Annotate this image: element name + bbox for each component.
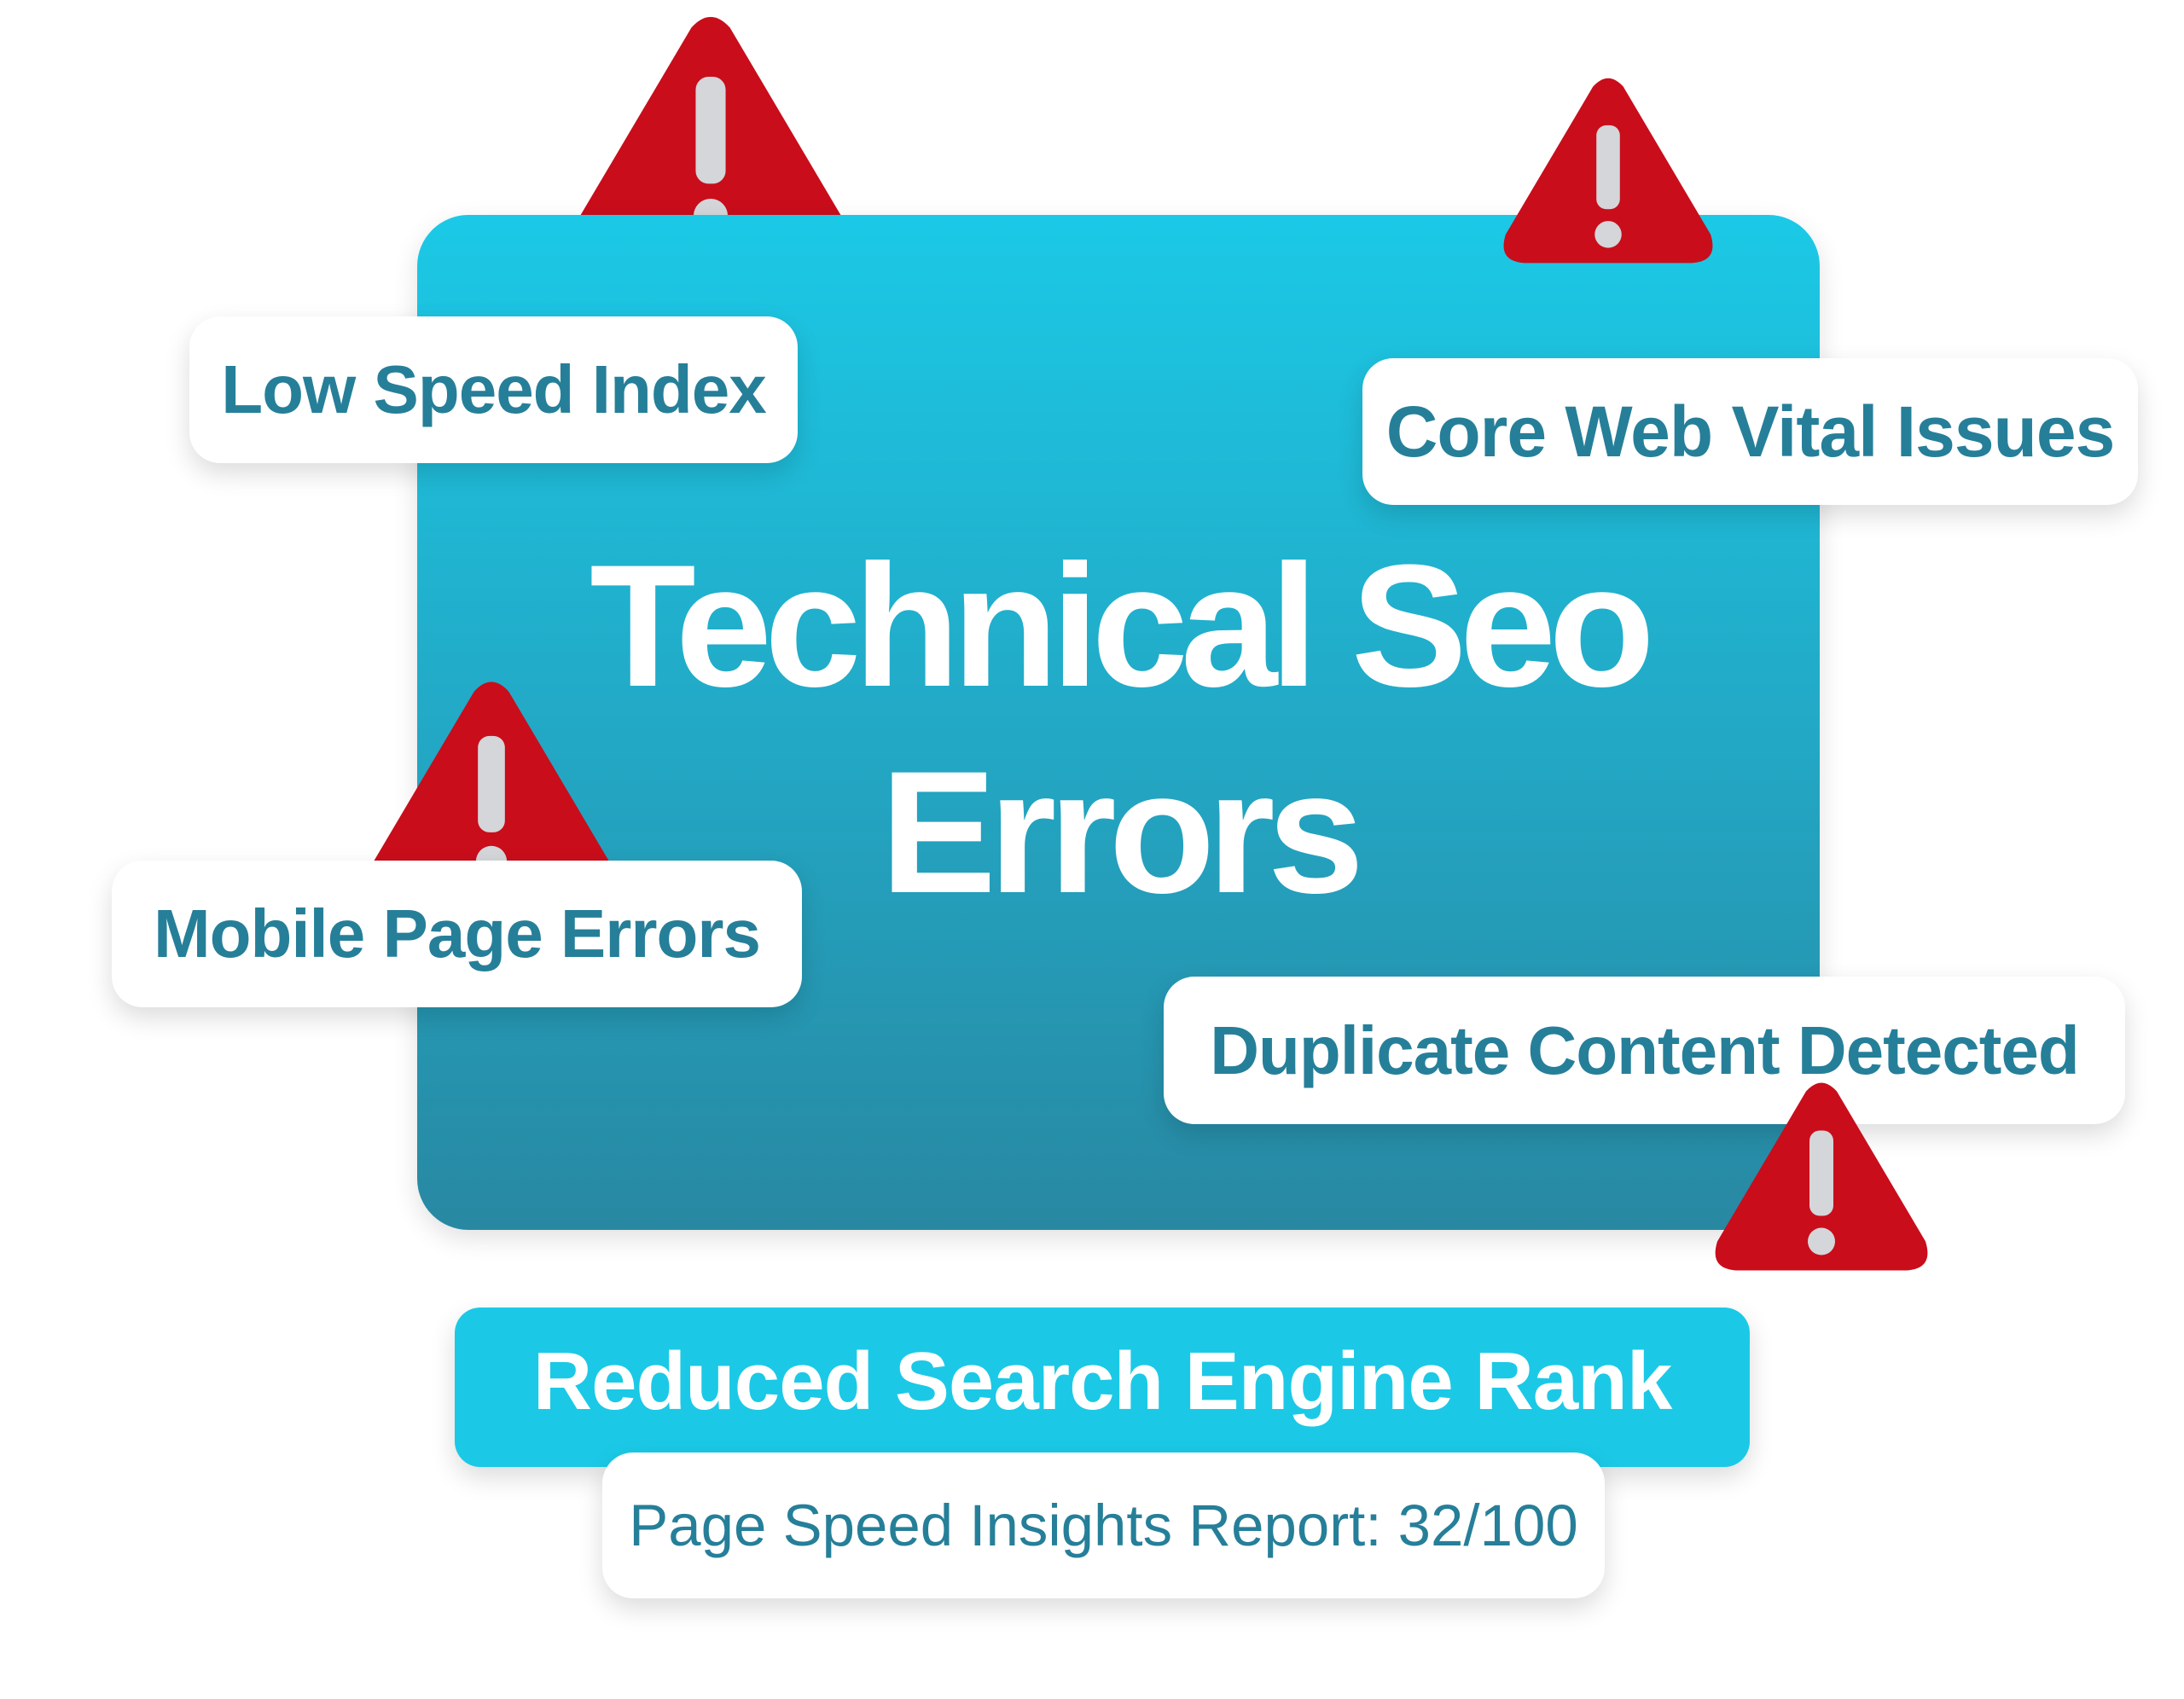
icon: warning top right bbox=[1503, 78, 1713, 263]
label: Duplicate Content Detected bbox=[1164, 977, 2125, 1124]
bar: Reduced Search Engine Rank bbox=[455, 1308, 1750, 1467]
label: Low Speed Index: Low Speed Index bbox=[221, 351, 766, 427]
label: Mobile Page Errors: Mobile Page Errors bbox=[154, 896, 760, 971]
label: Duplicate Content Detected: Duplicate Content Detected bbox=[1210, 1012, 2079, 1088]
title: Technical Seo bbox=[590, 529, 1647, 723]
label: Page Speed Insights Report: Page Speed Insights Report: 32/100 bbox=[629, 1493, 1578, 1558]
bar: Reduced Search Engine Rank: Reduced Search Engine Rank bbox=[533, 1336, 1671, 1426]
icon: warning mobile (behind box) bbox=[374, 682, 609, 861]
label: Low Speed Index bbox=[189, 316, 798, 463]
icon: warning top left (behind panel) bbox=[580, 17, 841, 215]
label: Core Web Vital Issues bbox=[1362, 358, 2138, 505]
icon: warning duplicate bbox=[1715, 1083, 1928, 1271]
label: Mobile Page Errors bbox=[112, 861, 802, 1007]
label: Core Web Vital Issues: Core Web Vital Issues bbox=[1386, 391, 2114, 471]
title line 2: Errors bbox=[880, 735, 1356, 930]
label: Page Speed Insights Report bbox=[602, 1453, 1605, 1598]
main panel bbox=[417, 215, 1820, 1230]
